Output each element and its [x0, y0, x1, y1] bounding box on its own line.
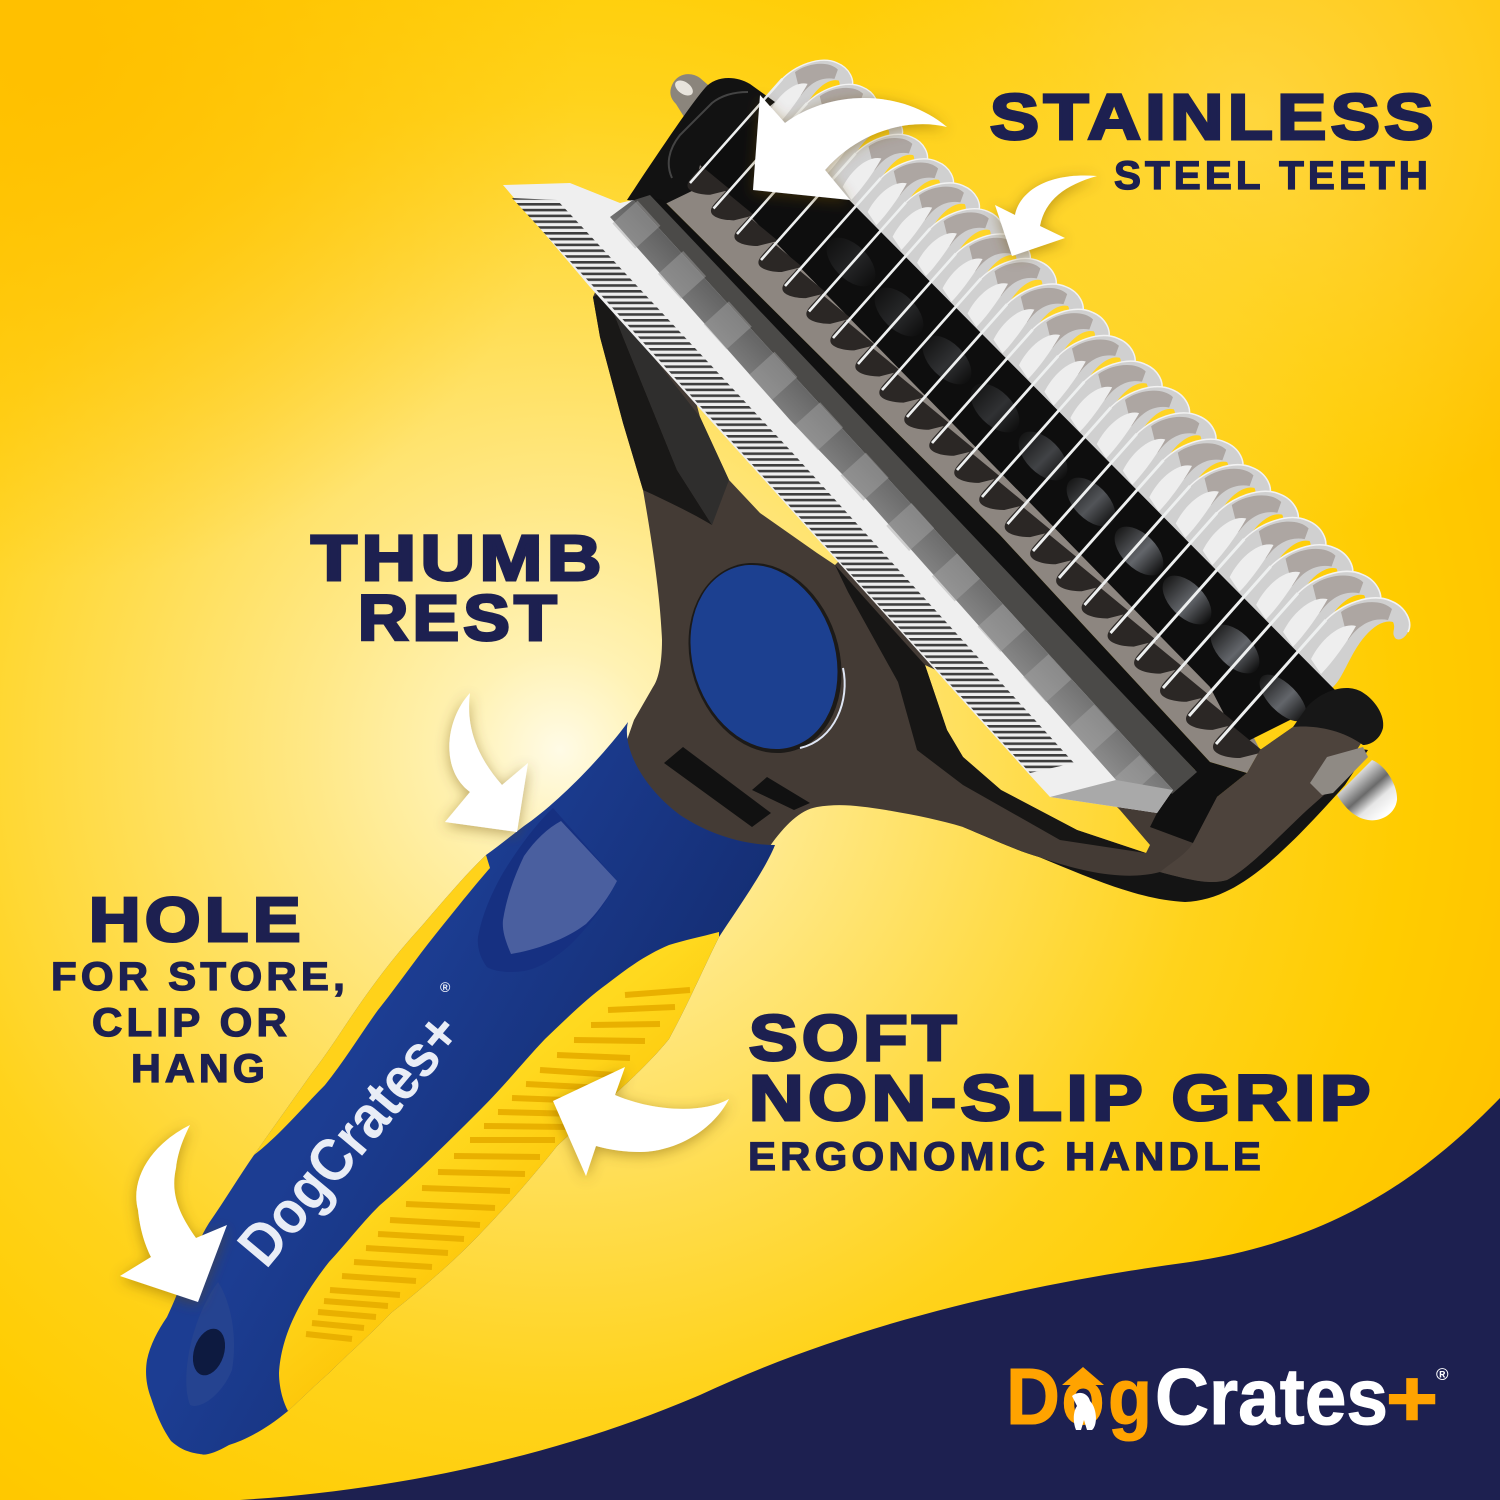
logo: Crates — [1155, 1352, 1388, 1441]
top right glow — [800, 0, 1500, 560]
label: soft non-slip grip: NON-SLIP GRIP — [749, 1062, 1375, 1134]
logo — [1006, 1352, 1449, 1443]
yellow lower grip — [279, 932, 719, 1411]
arrow: thumb rest — [445, 693, 528, 832]
label: stainless steel teeth: STEEL TEETH — [1114, 154, 1432, 198]
label: hole — [51, 886, 349, 1091]
bronze body frame — [593, 190, 1363, 882]
arrow: stainless top — [753, 95, 947, 200]
thumb rest pad — [665, 543, 865, 773]
label: thumb rest: REST — [358, 582, 561, 654]
logo house icon: o — [1061, 1352, 1105, 1441]
arrow: steel teeth — [995, 175, 1097, 256]
hanging hole — [187, 1325, 231, 1379]
cap rim — [669, 92, 748, 178]
handle registered mark: ® — [440, 979, 451, 995]
black rim by opening — [835, 565, 1146, 853]
grooming tool — [146, 60, 1410, 1455]
blade foot — [1050, 780, 1173, 813]
lower arm black shade — [963, 740, 1368, 902]
hole recess — [186, 1282, 234, 1406]
arrow: grip — [553, 1067, 729, 1176]
top left orange tint — [0, 0, 600, 600]
logo: ® — [1436, 1365, 1449, 1384]
gray strip behind tines — [663, 150, 1260, 773]
roller cylinders — [818, 229, 1314, 729]
label: thumb rest: THUMB — [311, 522, 606, 594]
logo: D — [1006, 1352, 1060, 1441]
yellow side strip — [254, 855, 490, 1155]
top pin — [670, 74, 714, 120]
label: soft non-slip grip: ERGONOMIC HANDLE — [748, 1135, 1265, 1179]
logo: + — [1386, 1354, 1438, 1443]
left arm gray sheen — [605, 290, 729, 525]
arrow: hole — [120, 1125, 227, 1302]
logo: g — [1108, 1352, 1152, 1441]
thumb indent — [503, 821, 617, 954]
label: hole: CLIP OR — [92, 1001, 291, 1045]
blue handle — [146, 722, 775, 1455]
blade reflections — [625, 212, 1143, 784]
tine wires — [687, 79, 1326, 758]
label: soft non-slip grip — [748, 1002, 1375, 1179]
neck slot large — [664, 747, 771, 827]
steel blades back — [736, 60, 1410, 714]
gray gasket — [625, 195, 1197, 794]
comb blade gray face — [610, 200, 1173, 800]
comb teeth — [512, 198, 1074, 773]
lower right bronze highlight — [1160, 715, 1363, 882]
label: stainless steel teeth — [990, 81, 1438, 198]
grip ribs — [306, 990, 690, 1339]
handle brand text: DogCrates+ — [225, 999, 474, 1278]
label: soft non-slip grip: SOFT — [749, 1002, 961, 1074]
label: hole: FOR STORE, — [51, 955, 349, 999]
navy wave — [240, 1098, 1500, 1500]
left arm black edge — [593, 290, 712, 525]
label: thumb rest — [311, 522, 606, 654]
label: hole: HANG — [131, 1047, 269, 1091]
black rail — [645, 197, 1247, 843]
neck slot small — [752, 777, 810, 810]
bottom end cap — [1293, 688, 1383, 745]
bottom pin — [1310, 747, 1397, 820]
label: hole: HOLE — [89, 886, 305, 955]
thumb indent groove — [478, 808, 617, 972]
label: stainless steel teeth: STAINLESS — [990, 81, 1438, 153]
top end cap — [627, 78, 775, 205]
black roller band — [700, 110, 1340, 745]
comb blade white face — [503, 183, 1173, 813]
